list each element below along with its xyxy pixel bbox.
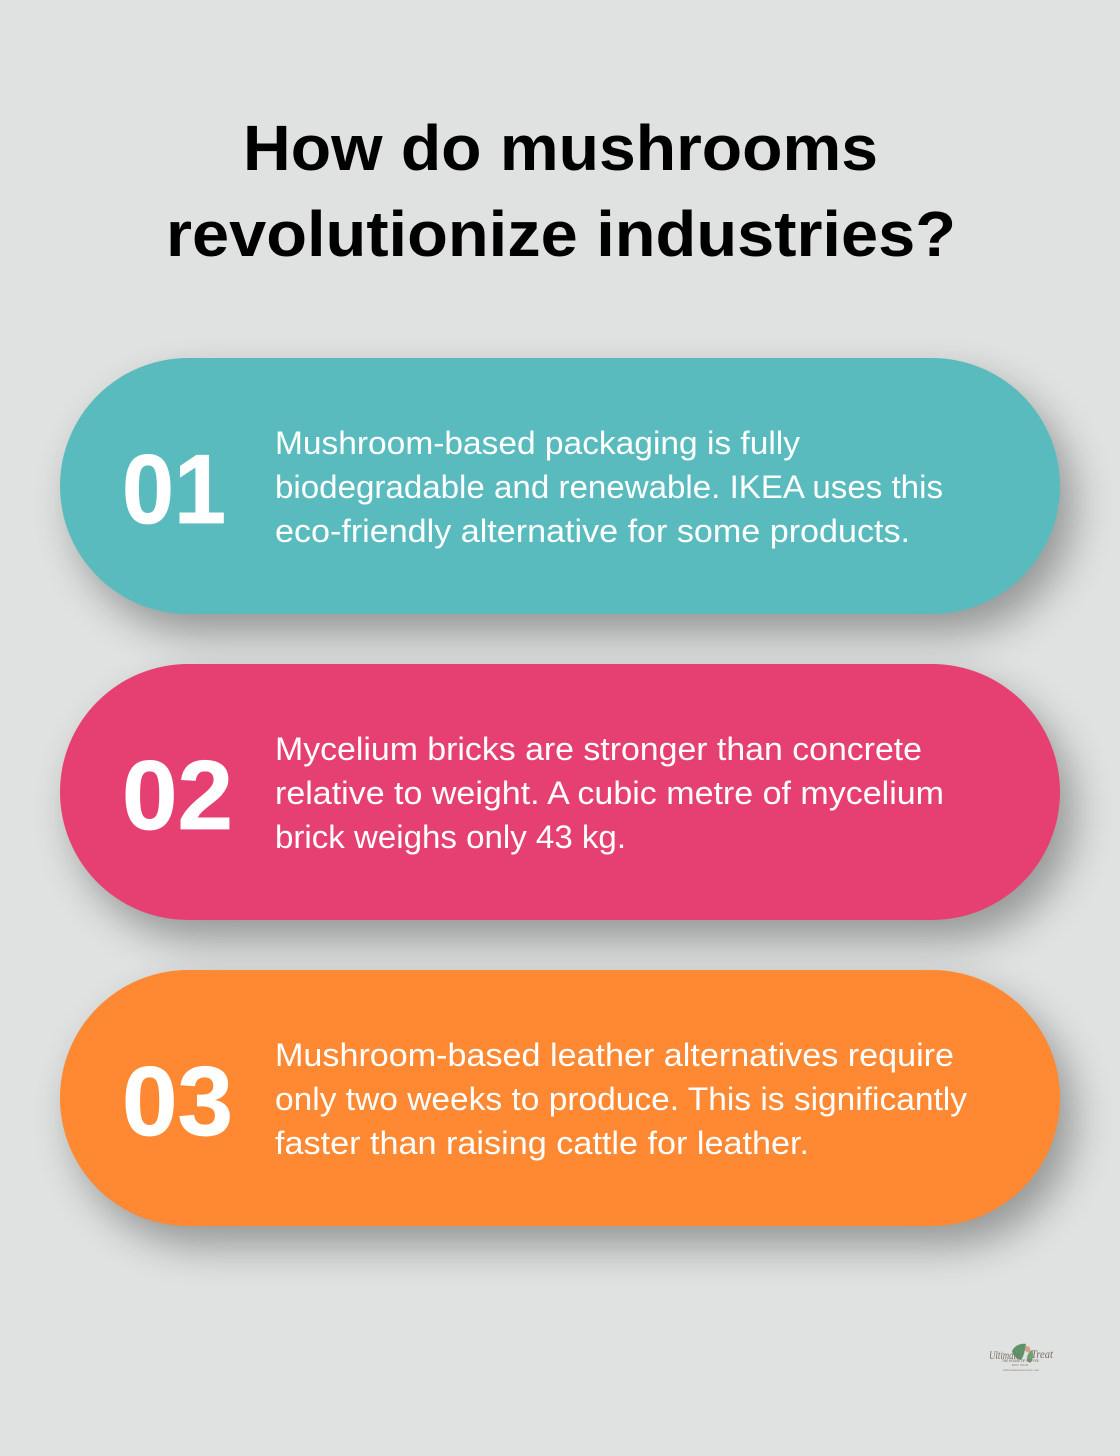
title: How do mushrooms — [243, 112, 878, 184]
card 03 text: faster than raising cattle for leather. — [275, 1125, 809, 1161]
card 01 text: eco-friendly alternative for some products. — [275, 513, 910, 549]
card 03 text — [275, 1037, 967, 1161]
card 01 text: Mushroom-based packaging is fully — [275, 425, 800, 461]
card 02 text: brick weighs only 43 kg. — [275, 819, 626, 855]
panel: card 01 background — [60, 358, 1060, 614]
card 01 text: biodegradable and renewable. IKEA uses this — [275, 469, 943, 505]
card 01 text — [275, 425, 943, 549]
title: revolutionize industries? — [166, 198, 956, 270]
card 01 number: 01 — [122, 434, 226, 544]
logo: THE HOUSE OF COFFEE — [1002, 1359, 1040, 1363]
card 02 text: Mycelium bricks are stronger than concrete — [275, 731, 922, 767]
logo: ultimatetreat.com.au — [1003, 1368, 1039, 1372]
logo — [989, 1344, 1054, 1372]
card 02 text: relative to weight. A cubic metre of mycelium — [275, 775, 944, 811]
card 02 text — [275, 731, 944, 855]
card 03 number: 03 — [122, 1046, 233, 1156]
logo: Ultimate — [989, 1348, 1020, 1362]
title — [166, 112, 956, 270]
card 03 text: Mushroom-based leather alternatives require — [275, 1037, 954, 1073]
logo: Treat — [1031, 1347, 1054, 1361]
panel: card 03 background — [60, 970, 1060, 1226]
panel: card 02 background — [60, 664, 1060, 920]
card 03 text: only two weeks to produce. This is significantly — [275, 1081, 967, 1117]
card 02 number: 02 — [122, 740, 233, 850]
logo: EST 2018 — [1012, 1364, 1029, 1367]
